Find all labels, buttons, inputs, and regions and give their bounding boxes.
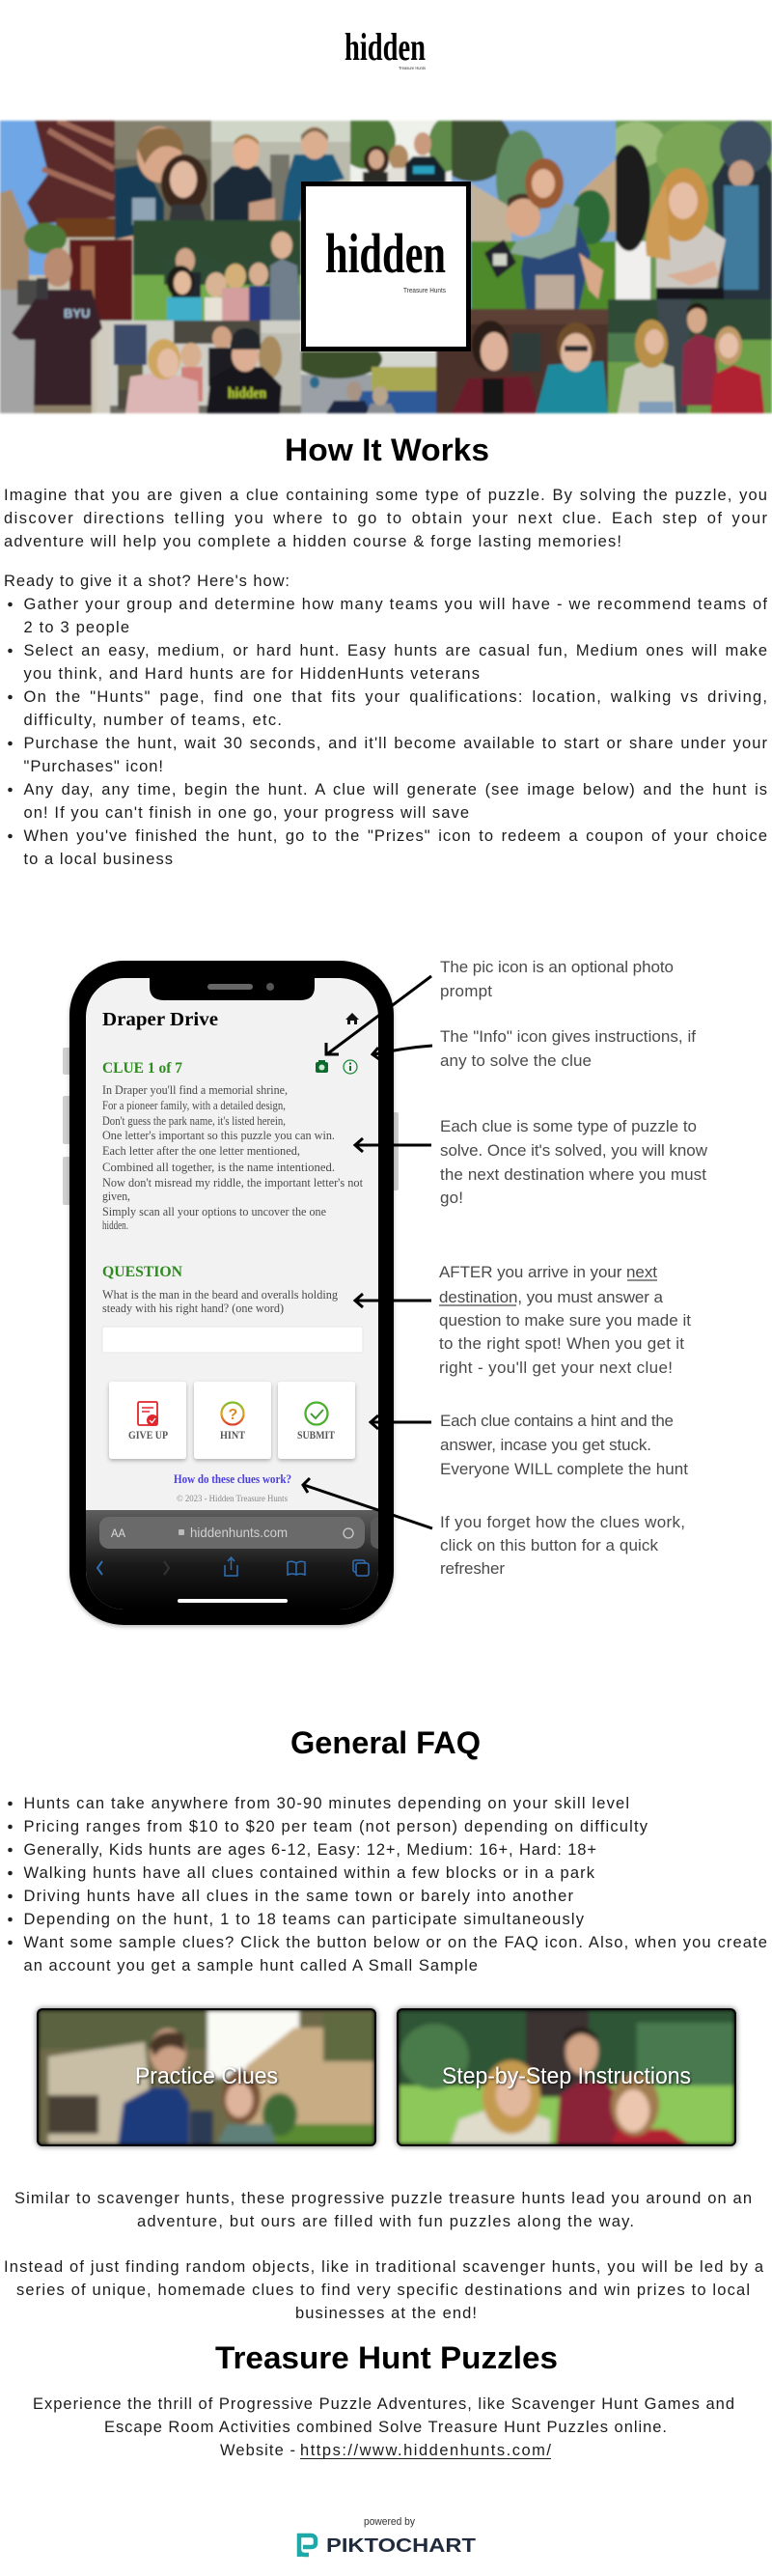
heading: General FAQ: General FAQ bbox=[290, 1725, 481, 1760]
phone screen bbox=[86, 978, 378, 1610]
paragraph: website: Escape Room Activities combined Solve Treasure Hunt Puzzles online. bbox=[104, 2419, 667, 2436]
callout: photo prompt: prompt bbox=[440, 982, 492, 1000]
button: submit bbox=[278, 1382, 355, 1459]
photo: two men crouching bbox=[210, 120, 352, 222]
photo: two women smiling bbox=[434, 307, 610, 415]
clue riddle text bbox=[102, 1083, 364, 1232]
clue riddle text: In Draper you'll find a memorial shrine, bbox=[102, 1083, 288, 1097]
callout: clue puzzle: go! bbox=[440, 1189, 463, 1207]
phone side buttons bbox=[63, 1048, 399, 1205]
photo: piggyback couple on a lawn bbox=[450, 119, 618, 311]
browser toolbar: AA bbox=[111, 1526, 125, 1540]
paragraph: similar to scavenger hunts: adventure, but ours are filled with fun puzzles along the way. bbox=[137, 2213, 634, 2230]
photo: blonde woman with friends bbox=[614, 119, 772, 301]
arrow: to help link bbox=[303, 1478, 432, 1528]
phone body bbox=[69, 961, 394, 1625]
how-to steps list: When you've finished the hunt, go to the "Prizes" icon to redeem a coupon of your choice bbox=[23, 827, 767, 845]
intro paragraph bbox=[4, 487, 767, 550]
callout: hint and answer: answer, incase you get stuck. bbox=[440, 1436, 651, 1454]
screen title: Draper Drive bbox=[102, 1009, 218, 1030]
icon: Piktochart mark bbox=[299, 2535, 316, 2557]
paragraph: similar to scavenger hunts: Similar to scavenger hunts, these progressive puzzle treasure hunts lead you around on an bbox=[14, 2190, 752, 2207]
arrow: to question bbox=[355, 1294, 431, 1307]
clue riddle text: hidden. bbox=[102, 1218, 128, 1232]
paragraph: website: https://www.hiddenhunts.com/ bbox=[300, 2442, 551, 2459]
top logo bbox=[345, 25, 427, 70]
FAQ list bbox=[8, 1795, 767, 1974]
how-to steps list: Select an easy, medium, or hard hunt. Easy hunts are casual fun, Medium ones will make bbox=[23, 642, 767, 659]
answer input bbox=[102, 1327, 363, 1353]
arrow: to camera icon bbox=[326, 976, 431, 1054]
center logo card: Treasure Hunts bbox=[403, 288, 446, 294]
icon: home bbox=[345, 1013, 359, 1024]
callout: clue puzzle: the next destination where you must bbox=[440, 1165, 706, 1184]
FAQ list: Pricing ranges from $10 to $20 per team (not person) depending on difficulty bbox=[23, 1818, 648, 1835]
clue riddle text: Combined all together, is the name intentioned. bbox=[102, 1161, 335, 1174]
callout: question: destination, you must answer a bbox=[439, 1288, 664, 1306]
arrow: to buttons bbox=[371, 1415, 431, 1429]
button: hint: ? bbox=[228, 1407, 237, 1423]
phone notch bbox=[150, 975, 315, 1000]
icon: info bbox=[344, 1060, 357, 1074]
how-to steps list: Any day, any time, begin the hunt. A clue will generate (see image below) and the hunt is bbox=[23, 781, 767, 798]
FAQ list: Driving hunts have all clues in the same town or barely into another bbox=[23, 1888, 573, 1905]
callout: question: right - you'll get your next clue! bbox=[439, 1358, 673, 1377]
paragraph: website: Website - bbox=[220, 2442, 295, 2459]
callout: clue puzzle bbox=[440, 1117, 708, 1207]
clue riddle text: given, bbox=[102, 1190, 130, 1203]
top logo: hidden bbox=[345, 25, 426, 69]
paragraph: similar to scavenger hunts bbox=[14, 2190, 752, 2230]
how-to steps list: to a local business bbox=[23, 851, 173, 868]
FAQ list: Want some sample clues? Click the button below or on the FAQ icon. Also, when you create bbox=[23, 1934, 767, 1951]
callout: refresher bbox=[440, 1513, 685, 1578]
how-to steps list bbox=[8, 596, 767, 868]
phone mockup bbox=[63, 961, 399, 1625]
button: Practice Clues photo: Practice Clues bbox=[135, 2063, 278, 2089]
arrow: to clue text bbox=[355, 1138, 431, 1152]
photo collage banner bbox=[0, 108, 772, 413]
intro paragraph: adventure will help you complete a hidden course & forge lasting memories! bbox=[4, 533, 621, 550]
center logo card bbox=[301, 182, 471, 351]
powered by Piktochart: powered by bbox=[364, 2516, 415, 2528]
clue riddle text: One letter's important so this puzzle you can win. bbox=[102, 1129, 335, 1142]
clue riddle text: Don't guess the park name, it's listed herein, bbox=[102, 1114, 286, 1128]
FAQ list: Hunts can take anywhere from 30-90 minutes depending on your skill level bbox=[23, 1795, 629, 1812]
callout: question: to the right spot! When you get it bbox=[439, 1334, 684, 1353]
photo: three friends against trees bbox=[349, 119, 454, 182]
powered by Piktochart: PIKTOCHART bbox=[326, 2535, 476, 2557]
center logo card: hidden bbox=[325, 222, 446, 285]
how-to steps list: 2 to 3 people bbox=[23, 619, 129, 636]
browser toolbar bbox=[86, 1510, 390, 1610]
how-to steps list: you think, and Hard hunts are for HiddenHunts veterans bbox=[23, 665, 480, 683]
callout: clue puzzle: Each clue is some type of puzzle to bbox=[440, 1117, 697, 1135]
how-to steps list: On the "Hunts" page, find one that fits your qualifications: location, walking vs driving, bbox=[23, 688, 767, 706]
callout: hint and answer bbox=[440, 1412, 688, 1478]
powered by Piktochart bbox=[299, 2516, 476, 2557]
intro paragraph: Imagine that you are given a clue containing some type of puzzle. By solving the puzzle, you bbox=[4, 487, 767, 504]
clue heading: CLUE 1 of 7 bbox=[102, 1060, 182, 1077]
photo: couple looking at a phone bbox=[113, 120, 212, 241]
button: hint bbox=[194, 1382, 271, 1459]
clue riddle text: Each letter after the one letter mentioned, bbox=[102, 1144, 300, 1158]
callout: info icon: The "Info" icon gives instructions, if bbox=[440, 1027, 696, 1046]
photo: trio under a tree bbox=[606, 297, 772, 415]
FAQ list: an account you get a sample hunt called A Small Sample bbox=[23, 1957, 478, 1974]
button: Practice Clues photo bbox=[37, 2008, 376, 2146]
question text bbox=[102, 1288, 339, 1315]
callout: info icon: any to solve the clue bbox=[440, 1051, 592, 1070]
how-to steps list: on! If you can't finish in one go, your progress will save bbox=[23, 804, 469, 822]
question heading: QUESTION bbox=[102, 1264, 182, 1280]
photo: man in BYU shirt on a street bbox=[0, 119, 134, 415]
photo: couple by a river bbox=[299, 350, 438, 415]
button: give up: GIVE UP bbox=[128, 1430, 168, 1442]
arrow: to info icon bbox=[372, 1046, 432, 1059]
callout: refresher: refresher bbox=[440, 1559, 505, 1578]
clue riddle text: For a pioneer family, with a detailed design, bbox=[102, 1099, 286, 1112]
callout: hint and answer: Everyone WILL complete the hunt bbox=[440, 1460, 688, 1478]
button: Step-by-Step Instructions photo: Step-by-Step Instructions bbox=[442, 2063, 691, 2089]
callout: question bbox=[439, 1263, 691, 1377]
how-to steps list: "Purchases" icon! bbox=[23, 758, 163, 775]
question text: What is the man in the beard and overalls holding bbox=[102, 1288, 339, 1302]
photo: group around a phone at a table: hidden bbox=[228, 385, 266, 402]
how-to steps list: Purchase the hunt, wait 30 seconds, and it'll become available to start or share under your bbox=[23, 735, 767, 752]
photo: group around a phone at a table bbox=[108, 319, 303, 415]
paragraph: instead of random objects: series of unique, homemade clues to find very specific destinations and win prizes to local bbox=[16, 2282, 750, 2299]
paragraph: website bbox=[33, 2395, 734, 2459]
paragraph: website: Experience the thrill of Progressive Puzzle Adventures, like Scavenger Hunt Games and bbox=[33, 2395, 734, 2413]
FAQ list: Depending on the hunt, 1 to 18 teams can participate simultaneously bbox=[23, 1911, 585, 1928]
callout: refresher: click on this button for a quick bbox=[440, 1536, 658, 1554]
callout: info icon bbox=[440, 1027, 696, 1070]
FAQ list: Walking hunts have all clues contained within a few blocks or in a park bbox=[23, 1864, 595, 1882]
callout: question: AFTER you arrive in your next bbox=[439, 1263, 657, 1281]
callout: photo prompt: The pic icon is an optional photo bbox=[440, 958, 674, 976]
photo: man in BYU shirt on a street: BYU bbox=[64, 306, 90, 321]
help link: How do these clues work? bbox=[174, 1471, 291, 1486]
how-to lead-in: Ready to give it a shot? Here's how: bbox=[4, 573, 290, 590]
button: submit: SUBMIT bbox=[297, 1430, 335, 1442]
callout: photo prompt bbox=[440, 958, 674, 1000]
photo: large group on grass bbox=[131, 218, 301, 322]
heading: Treasure Hunt Puzzles: Treasure Hunt Puzzles bbox=[215, 2340, 558, 2375]
paragraph: instead of random objects bbox=[4, 2258, 764, 2322]
paragraph: instead of random objects: businesses at the end! bbox=[295, 2305, 477, 2322]
clue riddle text: Now don't misread my riddle, the important letter's not bbox=[102, 1176, 364, 1190]
copyright: © 2023 - Hidden Treasure Hunts bbox=[177, 1494, 288, 1504]
callout: clue puzzle: solve. Once it's solved, you will know bbox=[440, 1141, 708, 1160]
button: Step-by-Step Instructions photo bbox=[397, 2008, 736, 2146]
button: hint: HINT bbox=[220, 1430, 245, 1442]
how-to steps list: Gather your group and determine how many teams you will have - we recommend teams of bbox=[23, 596, 767, 613]
top logo: Treasure Hunts bbox=[399, 66, 427, 70]
callout: refresher: If you forget how the clues work, bbox=[440, 1513, 685, 1531]
clue riddle text: Simply scan all your options to uncover the one bbox=[102, 1205, 326, 1218]
how-to steps list: difficulty, number of teams, etc. bbox=[23, 712, 282, 729]
heading: How It Works: How It Works bbox=[285, 433, 489, 467]
FAQ list: Generally, Kids hunts are ages 6-12, Easy: 12+, Medium: 16+, Hard: 18+ bbox=[23, 1841, 596, 1859]
intro paragraph: discover directions telling you where to go to obtain your next clue. Each step of your bbox=[4, 510, 767, 527]
browser toolbar: hiddenhunts.com bbox=[190, 1525, 288, 1540]
button: give up bbox=[109, 1382, 186, 1459]
icon: camera bbox=[316, 1060, 328, 1073]
callout: question: question to make sure you made it bbox=[439, 1311, 691, 1330]
callout: hint and answer: Each clue contains a hint and the bbox=[440, 1412, 674, 1430]
paragraph: instead of random objects: Instead of just finding random objects, like in traditional scavenger hunts, you will be led by a bbox=[4, 2258, 764, 2276]
question text: steady with his right hand? (one word) bbox=[102, 1302, 284, 1315]
